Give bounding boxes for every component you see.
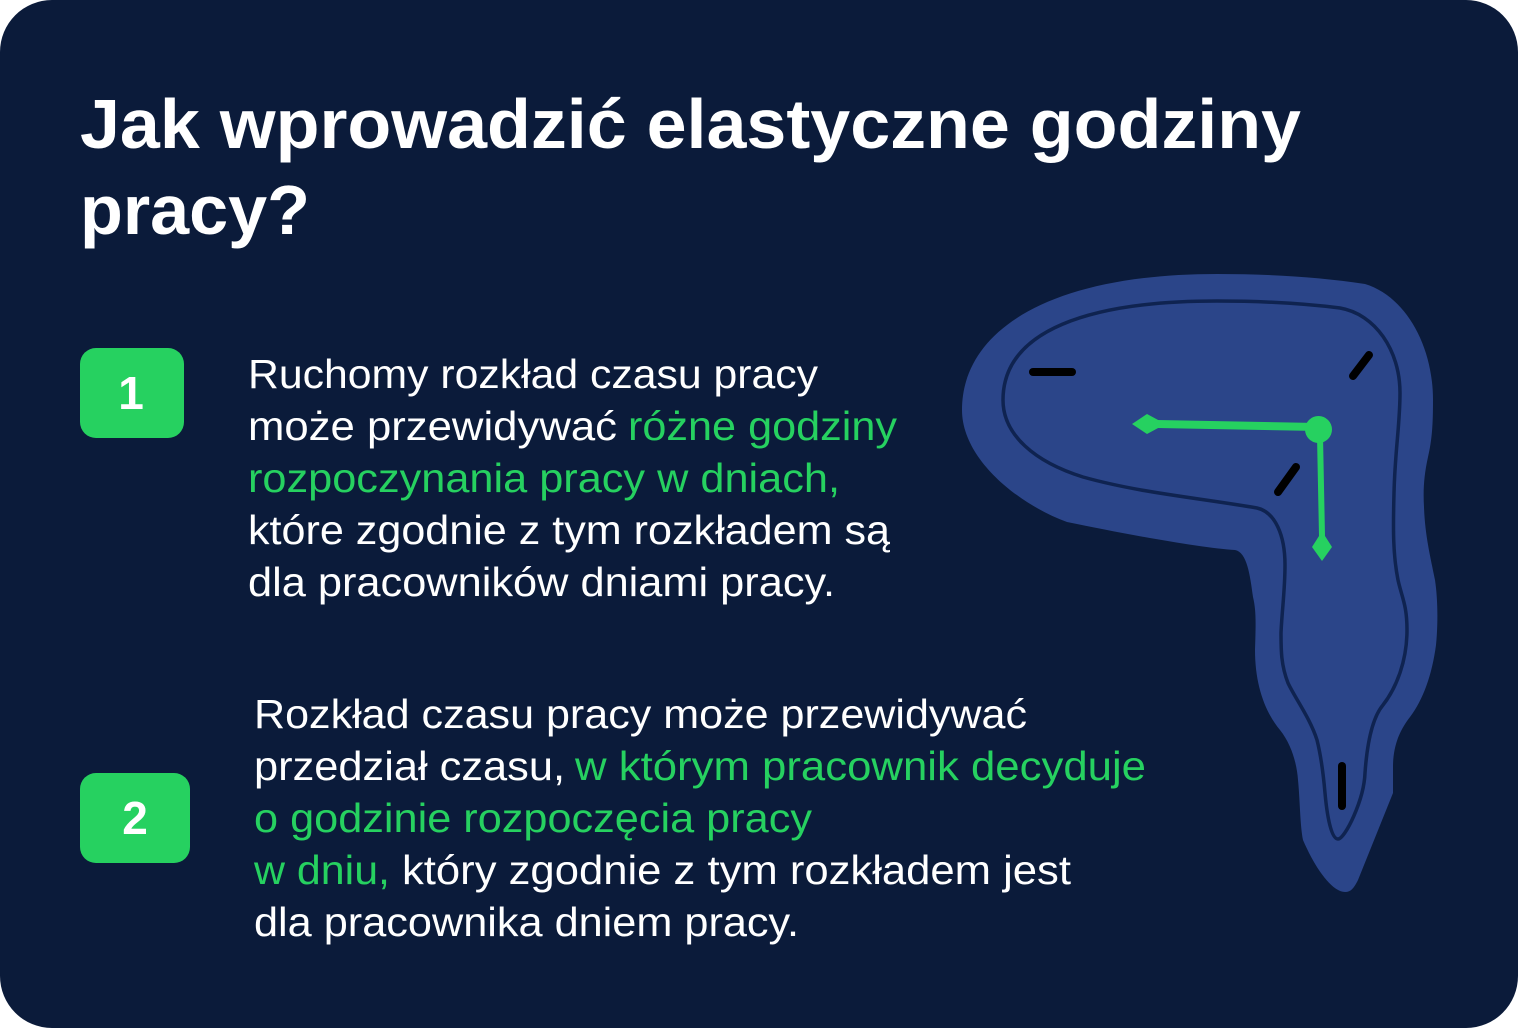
clock tick marks	[1033, 355, 1369, 806]
icon: melting clock	[962, 274, 1437, 892]
clock hands	[1132, 414, 1332, 561]
text block: item 1: rozpoczynania pracy w dniach,	[248, 455, 840, 501]
badge: number 2: 2	[122, 792, 148, 844]
text block: item 2: który zgodnie z tym rozkładem jest	[402, 847, 1072, 893]
title: pracy?	[80, 171, 310, 249]
text block: item 1: które zgodnie z tym rozkładem są	[248, 507, 890, 553]
text block: item 1: Ruchomy rozkład czasu pracy	[248, 351, 819, 397]
text block: item 2: o godzinie rozpoczęcia pracy	[254, 795, 813, 841]
text block: item 2: dla pracownika dniem pracy.	[254, 899, 799, 945]
text block: item 2: przedział czasu,	[254, 743, 565, 789]
clock body	[962, 274, 1437, 892]
title	[80, 85, 1301, 249]
title: Jak wprowadzić elastyczne godziny	[80, 85, 1301, 163]
text block: item 1	[248, 351, 898, 605]
badge: number 2	[80, 773, 190, 863]
clock rim line	[1003, 301, 1407, 839]
badge: number 1: 1	[118, 367, 144, 419]
text block: item 2: Rozkład czasu pracy może przewidywać	[254, 691, 1027, 737]
text block: item 1: różne godziny	[628, 403, 898, 449]
badge: number 1	[80, 348, 184, 438]
text block: item 2	[253, 691, 1146, 945]
text block: item 1: dla pracowników dniami pracy.	[248, 559, 835, 605]
text block: item 2: w dniu,	[253, 847, 390, 893]
text block: item 2: w którym pracownik decyduje	[574, 743, 1146, 789]
text block: item 1: może przewidywać	[248, 403, 617, 449]
